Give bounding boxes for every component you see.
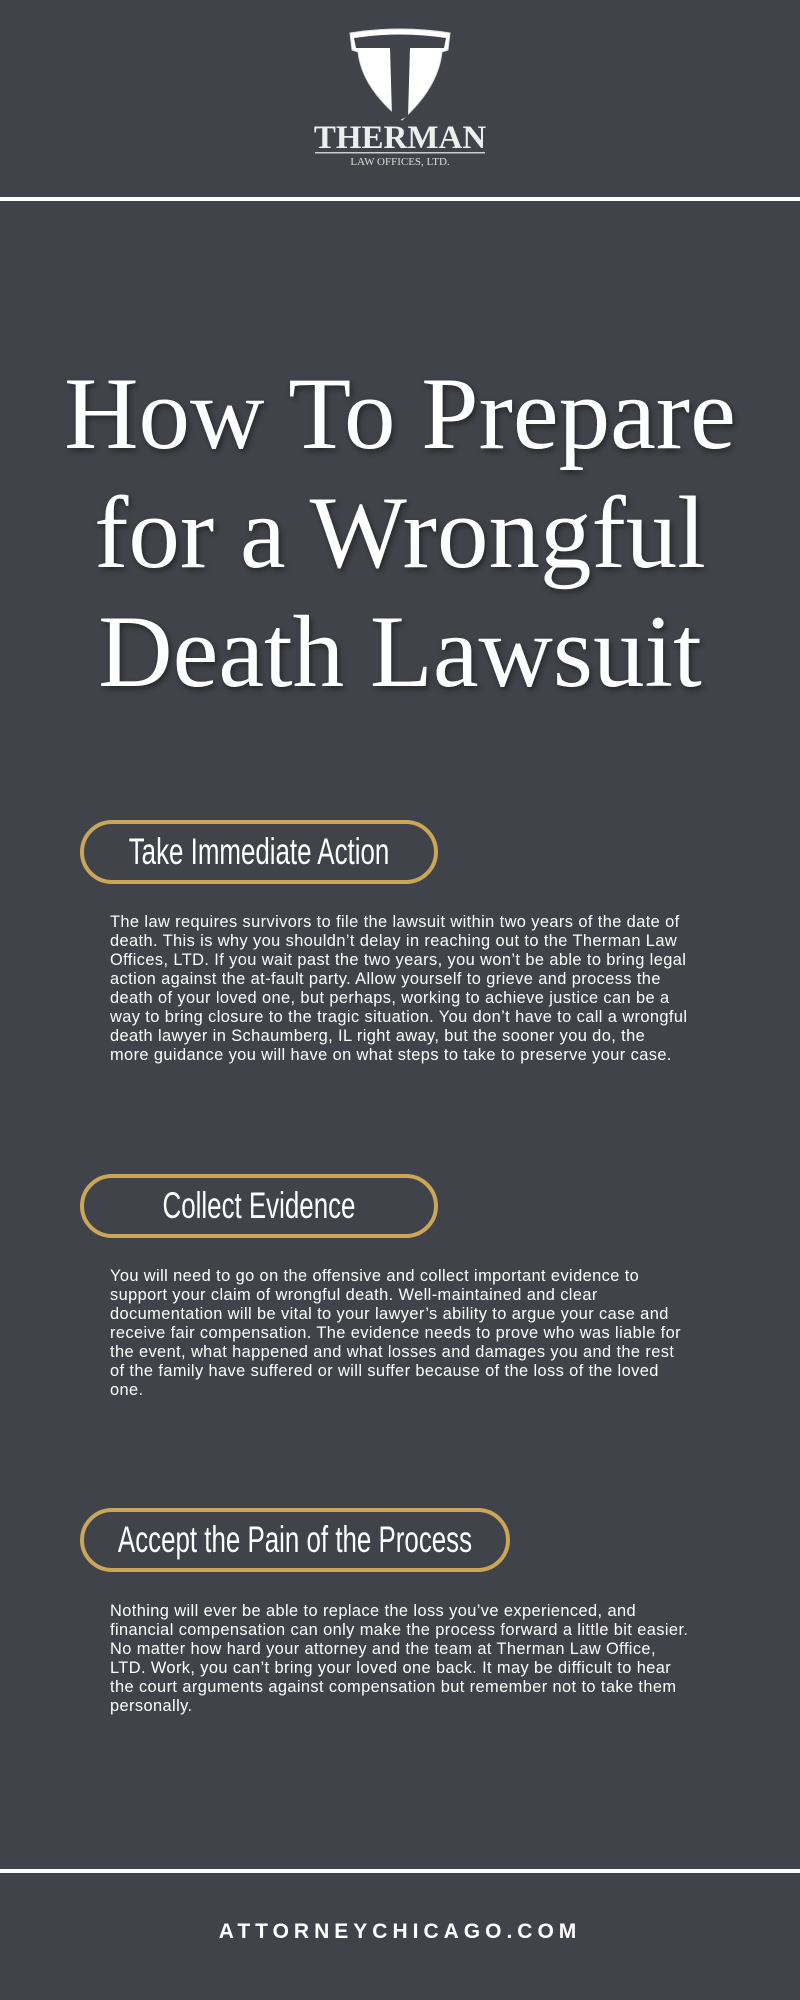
text block: action: The law requires survivors to file the lawsuit within two years of the date of bbox=[110, 913, 680, 931]
text block: action: death of your loved one, but perhaps, working to achieve justice can be a bbox=[110, 989, 670, 1007]
title: Death Lawsuit bbox=[98, 595, 702, 709]
text block: pain: financial compensation can only make the process forward a little bit easier. bbox=[110, 1621, 688, 1639]
text block: action: death. This is why you shouldn’t delay in reaching out to the Therman Law bbox=[110, 932, 677, 950]
text block: pain: LTD. Work, you can’t bring your loved one back. It may be difficult to hear bbox=[110, 1659, 671, 1677]
footer url: ATTORNEYCHICAGO.COM bbox=[219, 1920, 581, 1943]
title: How To Prepare bbox=[64, 357, 736, 471]
text block: action: more guidance you will have on what steps to take to preserve your case. bbox=[110, 1046, 672, 1064]
text block: action: Offices, LTD. If you wait past the two years, you won’t be able to bring legal bbox=[110, 951, 686, 969]
title: for a Wrongful bbox=[94, 476, 706, 590]
logo text: THERMAN bbox=[314, 120, 486, 156]
heading: Take Immediate Action bbox=[80, 820, 438, 884]
text block: evidence: support your claim of wrongful death. Well-maintained and clear bbox=[110, 1286, 598, 1304]
text block: evidence: You will need to go on the offensive and collect important evidence to bbox=[110, 1267, 639, 1285]
logo text: LAW OFFICES, LTD. bbox=[350, 156, 450, 168]
title bbox=[64, 357, 736, 709]
heading: Accept the Pain bbox=[80, 1508, 510, 1572]
text block: action: death lawyer in Schaumberg, IL right away, but the sooner you do, the bbox=[110, 1027, 645, 1045]
heading: Accept the Pain: Accept the Pain of the Process bbox=[118, 1519, 472, 1560]
text block: evidence: documentation will be vital to your lawyer’s ability to argue your case and bbox=[110, 1305, 669, 1323]
logo bbox=[314, 28, 486, 168]
heading: Collect Evidence bbox=[80, 1174, 438, 1238]
text block: evidence: one. bbox=[110, 1381, 144, 1399]
text block: pain: the court arguments against compensation but remember not to take them bbox=[110, 1678, 676, 1696]
text block: evidence: receive fair compensation. The evidence needs to prove who was liable for bbox=[110, 1324, 681, 1342]
text block: action bbox=[110, 913, 687, 1064]
heading: Collect Evidence: Collect Evidence bbox=[163, 1185, 355, 1226]
text block: pain: Nothing will ever be able to replace the loss you’ve experienced, and bbox=[110, 1602, 636, 1620]
text block: evidence: the event, what happened and what losses and damages you and the rest bbox=[110, 1343, 674, 1361]
heading: Take Immediate Action: Take Immediate Action bbox=[129, 831, 389, 872]
text block: evidence: of the family have suffered or will suffer because of the loss of the loved bbox=[110, 1362, 659, 1380]
text block: action: way to bring closure to the tragic situation. You don’t have to call a wrongful bbox=[110, 1008, 687, 1026]
text block: pain: No matter how hard your attorney and the team at Therman Law Office, bbox=[110, 1640, 656, 1658]
text block: pain: personally. bbox=[110, 1697, 192, 1715]
text block: pain bbox=[110, 1602, 688, 1715]
icon: shield bbox=[350, 29, 450, 120]
text block: evidence bbox=[110, 1267, 681, 1399]
text block: action: action against the at-fault party. Allow yourself to grieve and process the bbox=[110, 970, 661, 988]
